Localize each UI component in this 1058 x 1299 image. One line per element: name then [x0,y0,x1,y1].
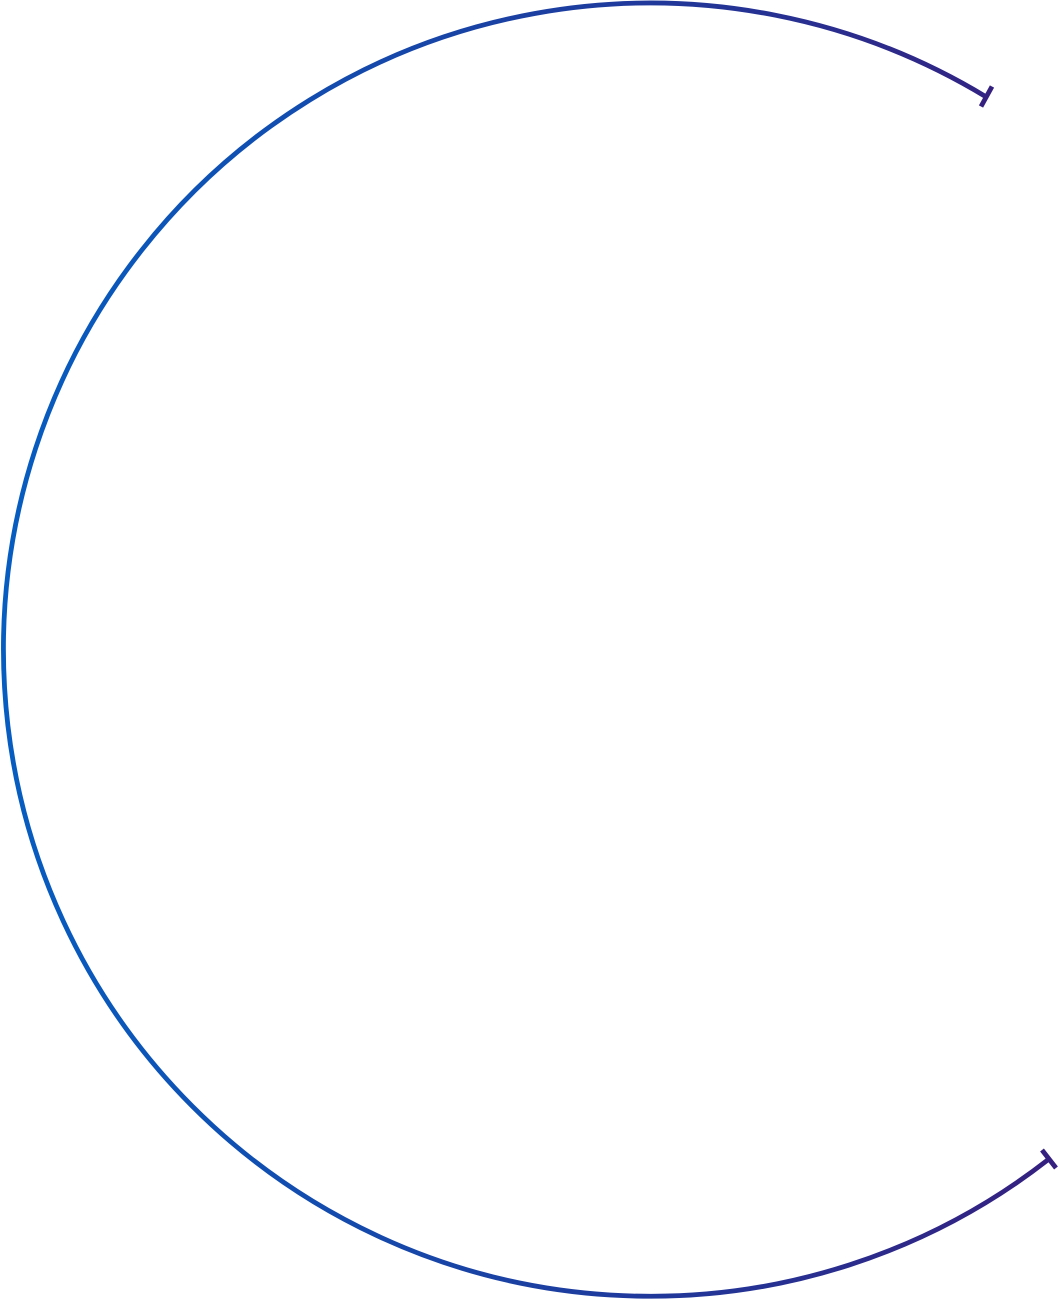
tick: bottom end cap [1042,1150,1056,1168]
tick: top end cap [981,86,992,106]
